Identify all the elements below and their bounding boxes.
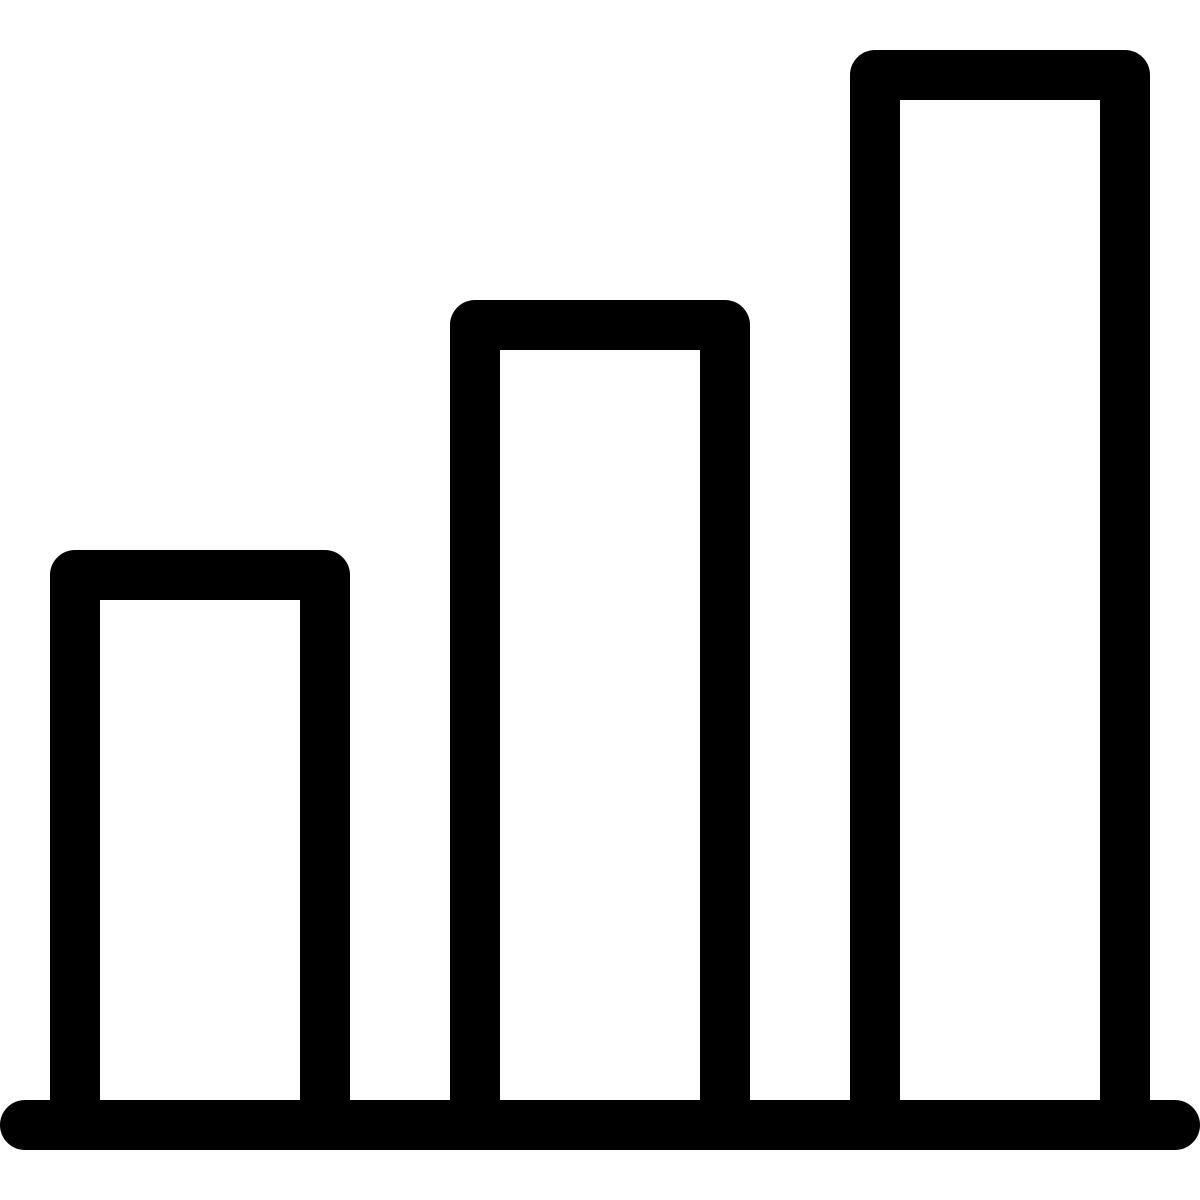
bar: medium middle: [475, 325, 725, 1125]
bar: short left: [75, 575, 325, 1125]
baseline: [25, 1100, 1175, 1150]
bar: tall right: [875, 75, 1125, 1125]
